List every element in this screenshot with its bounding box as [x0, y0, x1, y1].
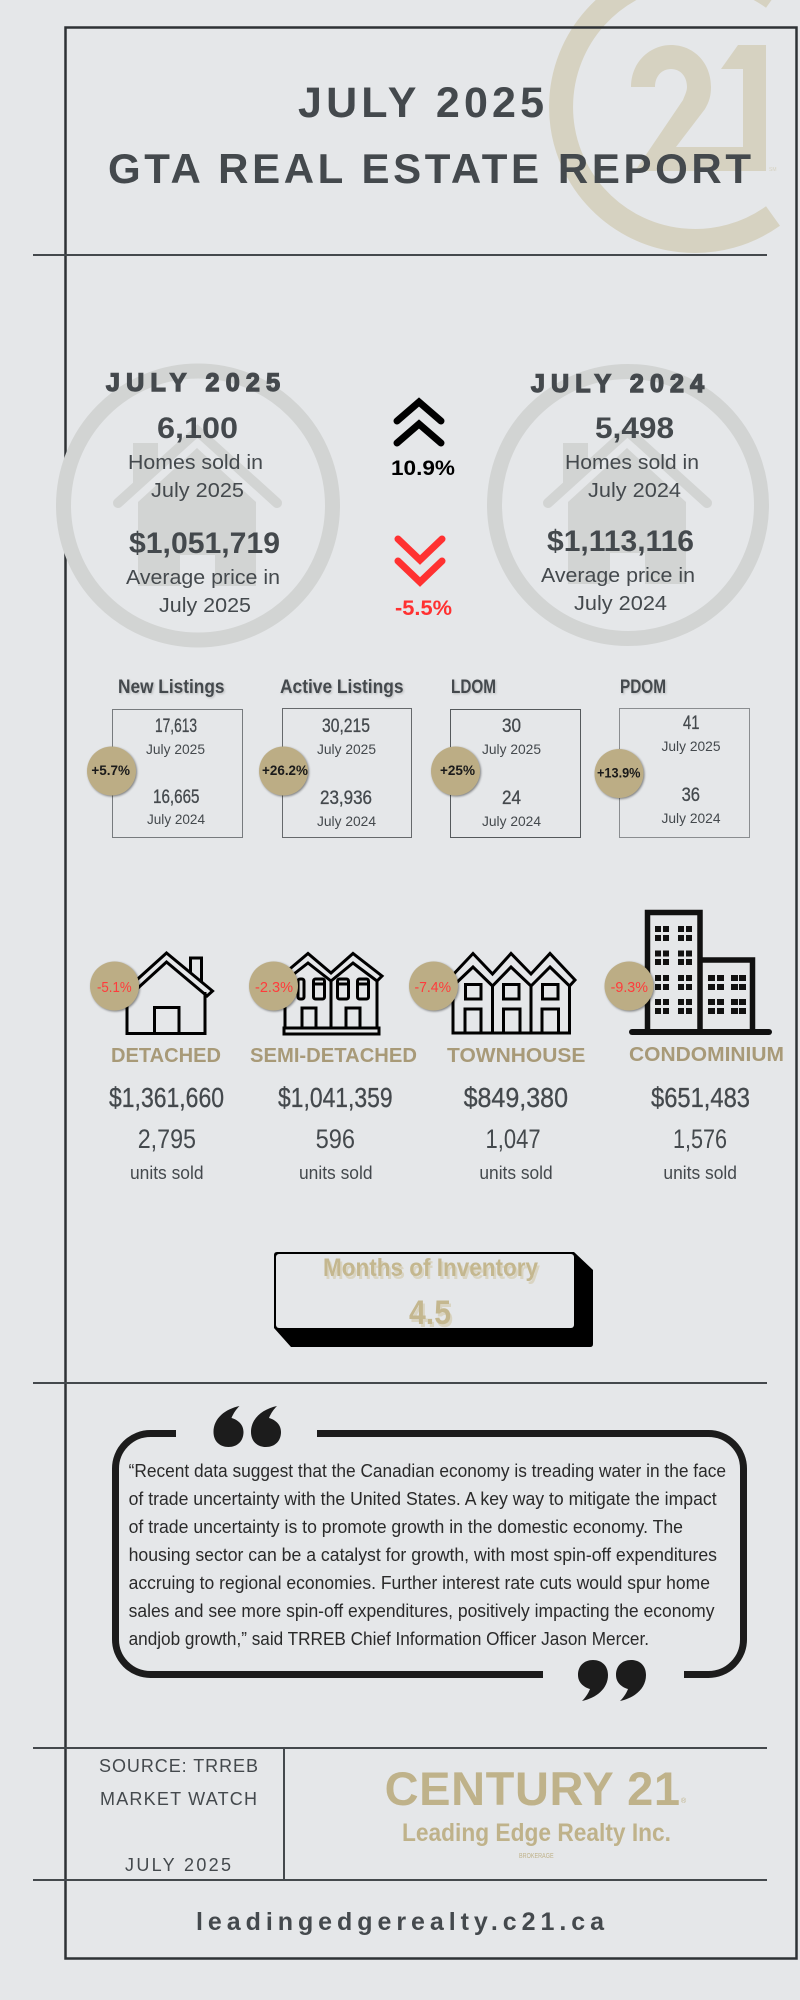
- source block: [99, 1756, 258, 1875]
- quote text: of trade uncertainty is to promote growth in the domestic economy. The: [129, 1517, 683, 1537]
- panel: July 2024 summary: JULY 2024: [531, 370, 704, 398]
- panel: New Listings: 16,665: [153, 787, 200, 808]
- panel: Condominium: units sold: [663, 1163, 737, 1183]
- panel: Active Listings: 23,936: [320, 788, 372, 809]
- panel: July 2025 summary: JULY 2025: [106, 369, 280, 397]
- panel: Townhouse: [409, 954, 585, 1183]
- icon: Century 21 watermark logo: [561, 0, 776, 241]
- panel: Townhouse: $849,380: [464, 1082, 568, 1113]
- panel: Months of Inventory: Months of Inventory: [323, 1254, 538, 1282]
- panel: LDOM: 24: [502, 788, 521, 809]
- Century 21 Leading Edge logo: CENTURY 21: [385, 1762, 680, 1815]
- panel: July 2025 summary: July 2025: [151, 480, 244, 502]
- panel: July 2024 summary: July 2024: [574, 593, 667, 615]
- badge: -7.4%: [409, 962, 458, 1010]
- panel: Months of Inventory: 4.5: [409, 1294, 451, 1332]
- icon: detached house: [120, 953, 212, 1034]
- icon: closing quotation marks: [578, 1660, 646, 1701]
- badge: +25%: +25%: [440, 763, 475, 778]
- badge: +26.2%: +26.2%: [262, 763, 308, 778]
- panel: LDOM: LDOM: [451, 677, 496, 698]
- badge: +26.2%: [259, 746, 308, 796]
- quote text: “Recent data suggest that the Canadian economy is treading water in the face: [129, 1461, 726, 1481]
- homes sold change: 10.9%: [391, 457, 455, 480]
- icon: double up arrow: [397, 402, 441, 443]
- panel: Condominium: [604, 912, 784, 1183]
- badge: +13.9%: [594, 749, 644, 798]
- panel: LDOM: July 2024: [482, 813, 541, 829]
- source block: SOURCE: TRREB: [99, 1756, 258, 1776]
- panel: July 2024 summary: $1,113,116: [547, 525, 694, 558]
- divider lines: [33, 255, 767, 1880]
- icon: house in circle watermark: [64, 371, 332, 640]
- website: leadingedgerealty.c21.ca: [196, 1908, 605, 1936]
- badge: +5.7%: [87, 746, 136, 796]
- badge: -9.3%: [604, 962, 654, 1010]
- panel: Months of Inventory: [274, 1252, 593, 1347]
- panel: July 2025 summary: 6,100: [157, 412, 238, 445]
- panel: July 2024 summary: Average price in: [541, 565, 695, 587]
- icon: semi-detached house: [284, 954, 382, 1034]
- panel: July 2024 summary: 5,498: [595, 412, 674, 445]
- Century 21 Leading Edge logo: [385, 1762, 687, 1860]
- panel: Active Listings: 30,215: [322, 716, 370, 737]
- panel: Detached: 2,795: [138, 1124, 196, 1154]
- panel: PDOM: [594, 677, 750, 838]
- badge: -2.3%: [249, 962, 298, 1010]
- panel: New Listings: July 2024: [147, 811, 205, 827]
- panel: Detached: $1,361,660: [109, 1082, 224, 1113]
- panel: Detached: DETACHED: [111, 1045, 221, 1067]
- panel: New Listings: [87, 677, 242, 838]
- panel: LDOM: 30: [502, 716, 521, 737]
- icon: opening quotation marks: [214, 1406, 281, 1447]
- panel: PDOM: 41: [683, 713, 700, 734]
- source block: JULY 2025: [125, 1855, 231, 1875]
- panel: PDOM: July 2024: [662, 810, 721, 826]
- quote text: sales and see more spin-off expenditures, positively impacting the economy: [129, 1601, 715, 1621]
- panel: Semi-Detached: [249, 954, 417, 1183]
- panel: July 2024 summary: Homes sold in: [565, 452, 699, 474]
- title: GTA REAL ESTATE REPORT: [108, 145, 751, 192]
- quote text: [129, 1461, 726, 1649]
- icon: house in circle watermark: [494, 372, 762, 638]
- Century 21 Leading Edge logo: ®: [681, 1797, 687, 1805]
- panel: PDOM: PDOM: [620, 677, 666, 698]
- panel: Condominium: CONDOMINIUM: [629, 1044, 784, 1066]
- icon: Century 21 watermark logo: SM: [769, 167, 776, 173]
- title: [108, 79, 751, 192]
- panel: Condominium: $651,483: [651, 1082, 750, 1113]
- panel: Active Listings: July 2024: [317, 813, 376, 829]
- Century 21 Leading Edge logo: Leading Edge Realty Inc.: [402, 1819, 671, 1847]
- panel: PDOM: 36: [682, 785, 700, 806]
- panel: Semi-Detached: units sold: [299, 1163, 372, 1183]
- badge: -5.1%: [90, 962, 139, 1010]
- panel: Townhouse: units sold: [479, 1163, 553, 1183]
- panel: July 2025 summary: $1,051,719: [129, 527, 280, 560]
- icon: condominium towers: [632, 912, 769, 1032]
- panel: July 2024 summary: [494, 370, 762, 638]
- icon: double down arrow: [398, 539, 442, 582]
- Century 21 Leading Edge logo: BROKERAGE: [519, 1853, 554, 1860]
- title: JULY 2025: [298, 79, 544, 127]
- panel: July 2025 summary: [64, 369, 332, 640]
- badge: +5.7%: +5.7%: [91, 763, 130, 778]
- panel: Active Listings: [259, 677, 412, 838]
- quote text: accruing to regional economies. Further interest rate cuts would spur home: [129, 1573, 710, 1593]
- panel: Detached: units sold: [130, 1163, 204, 1183]
- panel: PDOM: July 2025: [662, 738, 721, 754]
- panel: New Listings: July 2025: [146, 741, 205, 757]
- badge: +13.9%: +13.9%: [597, 766, 640, 780]
- quote text: housing sector can be a catalyst for growth, with most spin-off expenditures: [129, 1545, 717, 1565]
- panel: New Listings: 17,613: [155, 716, 197, 737]
- panel: Townhouse: 1,047: [486, 1124, 541, 1154]
- panel: Semi-Detached: $1,041,359: [278, 1082, 393, 1113]
- panel: Detached: [90, 953, 224, 1183]
- average price change: -5.5%: [395, 597, 452, 620]
- panel: LDOM: [431, 677, 580, 838]
- panel: July 2025 summary: Average price in: [126, 567, 280, 589]
- panel: Semi-Detached: 596: [316, 1124, 355, 1154]
- panel: July 2025 summary: July 2025: [159, 595, 251, 617]
- badge: -2.3%: -2.3%: [255, 979, 293, 996]
- panel: July 2025 summary: Homes sold in: [128, 452, 263, 474]
- quote frame: [116, 1434, 744, 1674]
- panel: July 2024 summary: July 2024: [588, 480, 681, 502]
- panel: Condominium: 1,576: [673, 1124, 727, 1154]
- source block: MARKET WATCH: [100, 1789, 257, 1809]
- panel: Active Listings: July 2025: [317, 741, 376, 757]
- panel: New Listings: New Listings: [118, 677, 224, 698]
- badge: +25%: [431, 746, 480, 796]
- panel: Townhouse: TOWNHOUSE: [447, 1045, 585, 1067]
- quote text: of trade uncertainty with the United States. A key way to mitigate the impact: [129, 1489, 717, 1509]
- quote text: andjob growth,” said TRREB Chief Information Officer Jason Mercer.: [129, 1629, 649, 1649]
- badge: -5.1%: -5.1%: [97, 979, 132, 996]
- badge: -7.4%: -7.4%: [414, 979, 451, 996]
- panel: Semi-Detached: SEMI-DETACHED: [250, 1045, 417, 1067]
- icon: townhouse: [450, 954, 575, 1033]
- badge: -9.3%: -9.3%: [611, 979, 648, 996]
- panel: LDOM: July 2025: [482, 741, 541, 757]
- panel: Active Listings: Active Listings: [280, 677, 404, 698]
- panel: quote: [116, 1406, 744, 1701]
